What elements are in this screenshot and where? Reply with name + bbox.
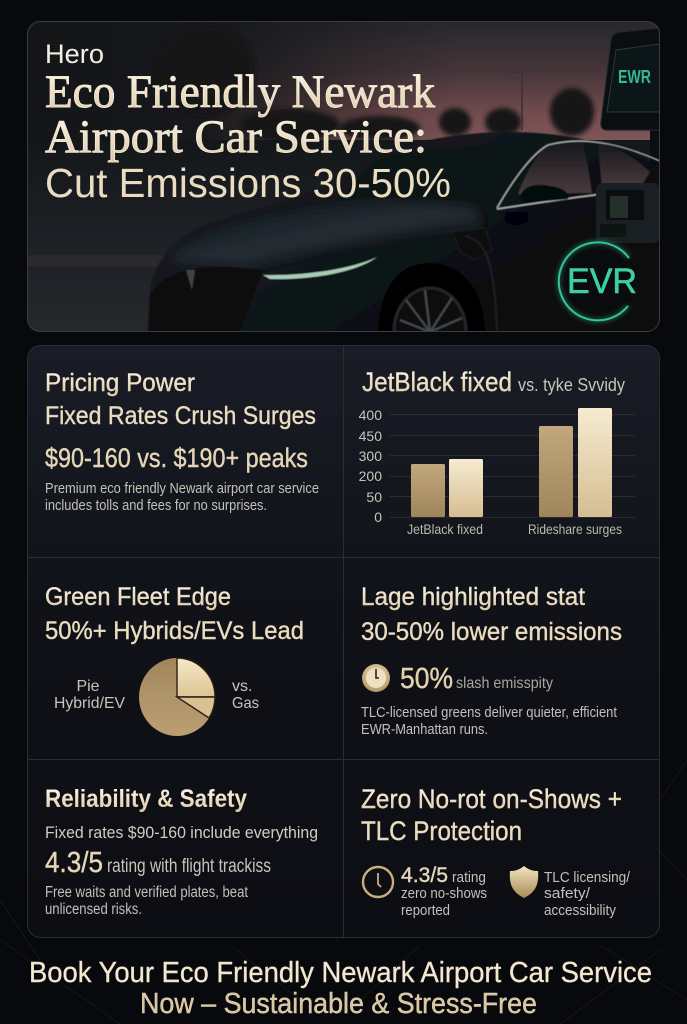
hero title — [45, 66, 451, 206]
cell: pricing power: Fixed Rates Crush Surges — [45, 402, 316, 430]
cell: bar chart: Rideshare surges — [528, 521, 622, 537]
cell: zero no-shows and TLC protection — [361, 784, 631, 919]
panel: six-cell grid — [28, 346, 660, 938]
cell: green fleet edge: vs. — [232, 678, 252, 695]
cell: zero no-shows and TLC protection: accessibility — [544, 902, 616, 919]
cell: zero no-shows and TLC protection: reported — [401, 902, 450, 919]
cell: reliability and safety: Fixed rates $90-160 include everything — [45, 823, 318, 842]
black electric car — [148, 132, 659, 331]
cell: pricing power: Pricing Power — [45, 369, 195, 397]
headlight — [263, 257, 377, 279]
cell: reliability and safety: Free waits and verified plates, beat — [45, 884, 249, 901]
cell: zero no-shows and TLC protection: safety/ — [544, 885, 591, 902]
wheel — [378, 262, 485, 331]
cell: bar chart: JetBlack fixed — [407, 521, 483, 537]
cell: bar chart: 300 — [359, 448, 382, 464]
hero photo background — [27, 21, 660, 332]
cell: highlighted stat: EWR-Manhattan runs. — [361, 721, 488, 738]
pie chart — [139, 658, 215, 736]
cell: reliability and safety: rating with flight trackiss — [107, 856, 271, 877]
cell: zero no-shows and TLC protection: TLC Protection — [361, 816, 522, 846]
cell: pricing power: $90-160 vs. $190+ peaks — [45, 443, 308, 473]
cell: highlighted stat: slash emisspity — [456, 675, 553, 692]
cell: highlighted stat — [361, 583, 622, 738]
cell: green fleet edge: Green Fleet Edge — [45, 583, 231, 611]
cell: highlighted stat: 50% — [400, 663, 453, 695]
cell: zero no-shows and TLC protection: 4.3/5 — [401, 864, 448, 887]
cell: green fleet edge: Hybrid/EV — [54, 695, 125, 712]
cell: zero no-shows and TLC protection: rating — [452, 869, 486, 886]
cell: green fleet edge: 50%+ Hybrids/EVs Lead — [45, 617, 304, 645]
cell: reliability and safety: Reliability & Safety — [45, 785, 247, 813]
call to action — [29, 957, 652, 1020]
wall charger — [596, 183, 660, 243]
hero title: Cut Emissions 30-50% — [45, 160, 451, 206]
hero label: Hero — [45, 39, 104, 69]
cell: pricing power: Premium eco friendly Newark airport car service — [45, 481, 319, 497]
icon: gold shield — [510, 866, 538, 898]
call to action: Book Your Eco Friendly Newark Airport Car Service — [29, 957, 652, 989]
cell: highlighted stat: TLC-licensed greens deliver quieter, efficient — [361, 704, 618, 721]
cell: green fleet edge: Pie — [76, 678, 100, 695]
EWR charging sign — [600, 28, 659, 165]
charging port and cable — [453, 228, 497, 332]
icon: gold clock — [362, 664, 390, 692]
cell: reliability and safety: 4.3/5 — [45, 847, 103, 879]
hero title: Eco Friendly Newark — [45, 66, 435, 118]
call to action: Now – Sustainable & Stress-Free — [140, 988, 537, 1020]
cell: bar chart: 450 — [359, 428, 382, 444]
cell: zero no-shows and TLC protection: TLC licensing/ — [544, 869, 631, 886]
panel: hero — [27, 21, 660, 332]
cell: bar chart: vs. tyke Svvidy — [518, 375, 625, 395]
icon: outlined clock — [363, 867, 393, 897]
hero title: Airport Car Service: — [45, 111, 427, 163]
cell: reliability and safety: unlicensed risks. — [45, 901, 142, 918]
EVR glowing badge — [559, 242, 637, 320]
cell: green fleet edge: Gas — [232, 695, 259, 712]
cell: zero no-shows and TLC protection: Zero No-rot on-Shows + — [361, 784, 622, 814]
cell: bar chart: 0 — [374, 509, 382, 525]
EVR glowing badge: EVR — [567, 262, 637, 301]
cell: bar chart — [359, 367, 635, 537]
cell: green fleet edge — [45, 583, 304, 736]
cell: bar chart: JetBlack fixed — [362, 367, 512, 397]
cell: highlighted stat: Lage highlighted stat — [361, 583, 585, 611]
cell: pricing power: includes tolls and fees for no surprises. — [45, 498, 267, 514]
cell: bar chart: 50 — [366, 489, 382, 505]
cell: bar chart: 400 — [359, 407, 382, 423]
cell: reliability and safety — [45, 785, 318, 918]
EWR charging sign: EWR — [618, 67, 651, 87]
cell: pricing power — [45, 369, 319, 514]
cell: highlighted stat: 30-50% lower emissions — [361, 618, 622, 646]
cell: zero no-shows and TLC protection: zero no-shows — [401, 885, 487, 902]
cell: bar chart: 200 — [359, 468, 382, 484]
